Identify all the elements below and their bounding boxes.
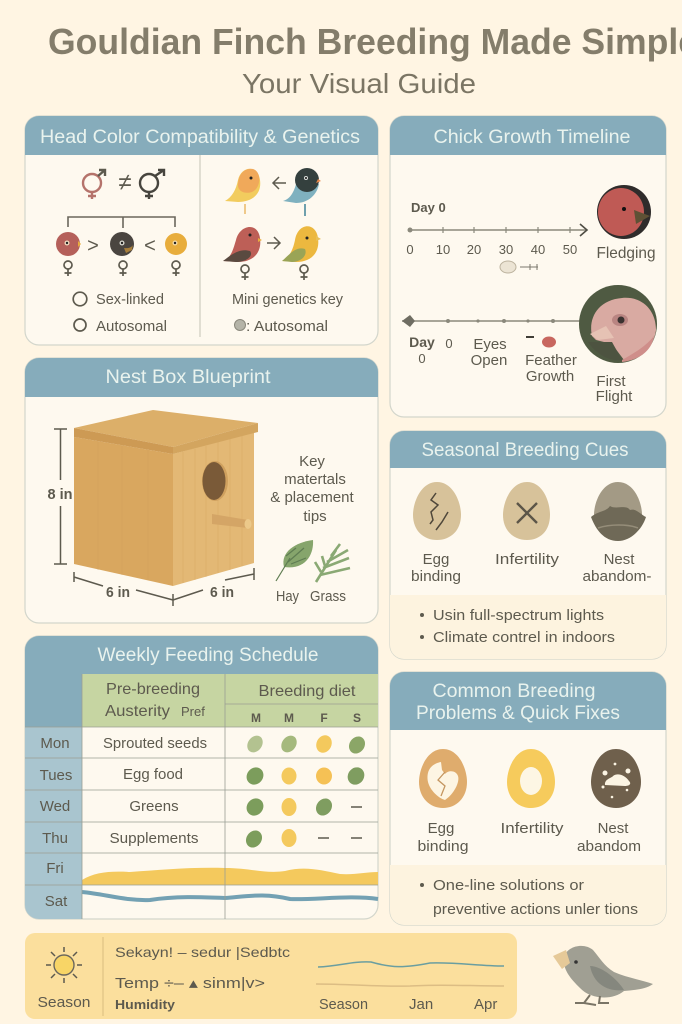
icon: grass xyxy=(315,544,350,582)
row labels: Sat xyxy=(45,893,68,910)
bullet list: fixes xyxy=(420,877,638,918)
heading: feeding: Weekly Feeding Schedule xyxy=(98,645,318,666)
dimension: width right: 6 in xyxy=(210,584,234,601)
timeline top: 40 xyxy=(531,242,545,257)
bullet list: cues: Climate contrel in indoors xyxy=(433,629,615,646)
labels: hay and grass: Grass xyxy=(310,588,346,605)
label: season: Season xyxy=(38,994,90,1011)
bracket xyxy=(68,217,175,228)
row labels: Fri xyxy=(46,860,64,877)
day columns: F xyxy=(320,711,328,725)
labels: problems: Egg xyxy=(428,820,454,837)
arrow: left xyxy=(273,177,286,189)
dimension: height xyxy=(48,429,72,564)
text: key materials: Key xyxy=(299,453,325,470)
food names: Supplements xyxy=(110,830,198,847)
labels: day 0: Day xyxy=(409,334,435,350)
heading: common problems xyxy=(416,681,620,724)
icon: brown egg xyxy=(591,749,641,808)
label: feather growth xyxy=(525,352,577,385)
dimension: width left: 6 in xyxy=(106,584,130,601)
female symbols right xyxy=(241,265,308,280)
labels: problems: Nest xyxy=(598,820,629,837)
food names xyxy=(103,735,207,847)
column heading: pre-breeding xyxy=(105,681,205,720)
yellow wave xyxy=(82,868,378,885)
food names: Sprouted seeds xyxy=(103,735,207,752)
icon: black head xyxy=(110,232,134,256)
food names: Greens xyxy=(129,798,179,815)
text: mini genetics key: Mini genetics key xyxy=(232,291,343,308)
text: key materials: matertals xyxy=(284,471,346,488)
less than: < xyxy=(144,235,156,257)
label: eyes open: Eyes xyxy=(473,336,507,353)
panel: seasonal breeding cues xyxy=(390,431,666,659)
text: strip line one: Sekayn! – sedur |Sedbtc xyxy=(115,944,290,960)
dashes xyxy=(318,807,362,838)
icon: infertile egg xyxy=(503,482,550,540)
labels: problems: Infertility xyxy=(500,820,564,837)
labels: cues: Nest xyxy=(604,551,635,568)
icon: egg in nest xyxy=(591,482,646,541)
panel: common breeding problems xyxy=(390,672,666,925)
labels: cues: abandom- xyxy=(582,568,652,585)
icon: gray bird xyxy=(553,946,653,1005)
timeline bottom xyxy=(402,315,582,327)
icon: yellow egg xyxy=(507,749,555,808)
panel: bottom season strip xyxy=(25,933,517,1019)
labels: problems: abandom xyxy=(577,838,641,855)
panel: chick growth timeline xyxy=(390,116,666,417)
label: eyes open xyxy=(471,336,507,369)
icon: yellow bird xyxy=(225,169,260,214)
labels: problems xyxy=(418,820,641,855)
row labels: Mon xyxy=(40,735,70,752)
column heading: breeding diet: Breeding diet xyxy=(258,683,356,700)
arrow: right xyxy=(267,237,280,249)
column heading: pre-breeding: Pre-breeding xyxy=(106,681,200,698)
legend: autosomal: Autosomal xyxy=(96,318,167,335)
heading: head color: Head Color Compatibility & Genetics xyxy=(40,127,360,148)
icon: egg small xyxy=(500,261,538,273)
icon: dark blue bird xyxy=(283,168,321,216)
label: feather growth: Feather xyxy=(525,352,577,369)
labels: hay and grass xyxy=(276,588,346,605)
female symbols left xyxy=(64,261,180,276)
label: eyes open: Open xyxy=(471,352,507,369)
heading: common problems: Problems & Quick Fixes xyxy=(416,703,620,724)
text: humidity: Humidity xyxy=(115,997,176,1012)
labels: cues: binding xyxy=(411,568,461,585)
panel: head color compatibility xyxy=(25,116,378,345)
greater than: > xyxy=(87,235,99,257)
icon: sun xyxy=(46,947,82,983)
labels: day 0: 0 xyxy=(418,351,426,366)
labels: cues xyxy=(411,551,652,585)
column heading: pre-breeding: Pref xyxy=(181,704,205,719)
timeline top xyxy=(406,224,587,257)
text: key materials: & placement xyxy=(270,489,355,506)
icon: red bird xyxy=(223,227,262,262)
photo: chick head xyxy=(579,285,657,363)
text: strip line two: Temp ÷– ▴ sinm|v> xyxy=(115,975,265,992)
bullet list: fixes: One-line solutions or xyxy=(433,877,584,894)
row labels xyxy=(40,735,72,910)
dimension: width left xyxy=(74,572,173,601)
panel: weekly feeding schedule xyxy=(25,636,378,919)
icon: dark male-female symbol xyxy=(140,170,164,199)
day columns xyxy=(251,711,361,725)
icon: red head xyxy=(56,232,81,256)
day columns: M xyxy=(284,711,294,725)
icon: cracked egg xyxy=(413,482,461,540)
photo: fledging head xyxy=(597,185,651,239)
dimension: width right xyxy=(173,568,254,606)
timeline top: 0 xyxy=(406,242,414,257)
chart labels: Apr xyxy=(474,996,497,1013)
panel: nest box xyxy=(25,358,378,623)
label: first flight xyxy=(596,373,633,405)
food names: Egg food xyxy=(123,766,183,783)
row labels: Wed xyxy=(40,798,70,815)
bullet list: fixes: preventive actions unler tions xyxy=(433,901,638,918)
icon: pink male-female symbol xyxy=(83,170,105,199)
illustration: nest box xyxy=(74,410,258,586)
chart labels: Season xyxy=(319,996,368,1013)
text: key materials xyxy=(270,453,355,525)
chart: season lines xyxy=(316,962,504,986)
chart labels: Jan xyxy=(409,996,433,1013)
dimension: height: 8 in xyxy=(48,486,72,503)
subtitle: Your Visual Guide xyxy=(242,68,476,99)
row labels: Thu xyxy=(42,830,68,847)
day columns: M xyxy=(251,711,261,725)
chart labels xyxy=(319,996,497,1013)
bullet list: cues xyxy=(420,607,615,646)
timeline top: 20 xyxy=(467,242,481,257)
text: key materials: tips xyxy=(303,508,327,525)
column heading: pre-breeding: Austerity xyxy=(105,703,170,720)
icon: yellow head xyxy=(165,233,187,255)
legend: autosomal gray: : Autosomal xyxy=(246,318,328,335)
not equal sign: ≠ xyxy=(118,169,132,196)
blue wave xyxy=(82,892,378,900)
labels: cues: Egg xyxy=(423,551,449,568)
labels: day 0 xyxy=(409,334,435,366)
heading: common problems: Common Breeding xyxy=(432,681,596,702)
day columns: S xyxy=(353,711,361,725)
bullet list: cues: Usin full-spectrum lights xyxy=(433,607,604,624)
legend: sex-linked: Sex-linked xyxy=(96,291,164,308)
timeline top: 30 xyxy=(499,242,513,257)
icon: orange egg xyxy=(419,749,467,808)
icon: yellow green bird xyxy=(282,226,321,262)
label: first flight: First xyxy=(596,373,626,390)
label: zero: 0 xyxy=(445,336,453,351)
heading: chick growth: Chick Growth Timeline xyxy=(434,127,630,148)
timeline top: 10 xyxy=(436,242,450,257)
table grid xyxy=(25,674,378,919)
label: fledging: Fledging xyxy=(596,245,656,262)
labels: problems: binding xyxy=(418,838,468,855)
label: feather growth: Growth xyxy=(526,368,574,385)
seed icons xyxy=(243,733,368,851)
row labels: Tues xyxy=(40,767,72,784)
timeline top: 50 xyxy=(563,242,577,257)
labels: hay and grass: Hay xyxy=(276,588,299,605)
label: first flight: Flight xyxy=(596,388,633,405)
labels: cues: Infertility xyxy=(495,551,560,568)
heading: nest box: Nest Box Blueprint xyxy=(106,367,271,388)
label: day 0: Day 0 xyxy=(411,200,446,215)
heading: seasonal: Seasonal Breeding Cues xyxy=(422,440,628,461)
icon: dash and feather xyxy=(526,336,556,348)
icon: hay xyxy=(276,540,313,581)
